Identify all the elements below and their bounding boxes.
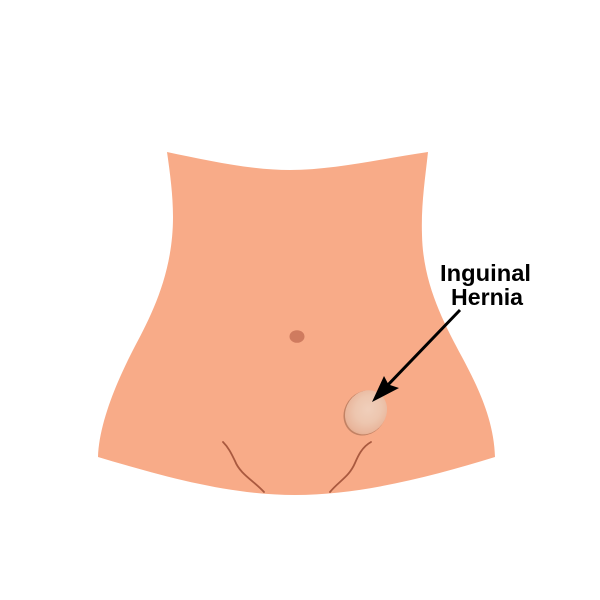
hernia bulge	[335, 382, 396, 444]
torso	[98, 152, 495, 495]
right groin crease	[330, 442, 371, 492]
navel	[290, 330, 304, 343]
left groin crease	[223, 442, 264, 492]
label: Inguinal	[440, 260, 531, 286]
label	[440, 260, 531, 310]
arrow	[372, 310, 460, 402]
label: Hernia	[451, 284, 524, 310]
